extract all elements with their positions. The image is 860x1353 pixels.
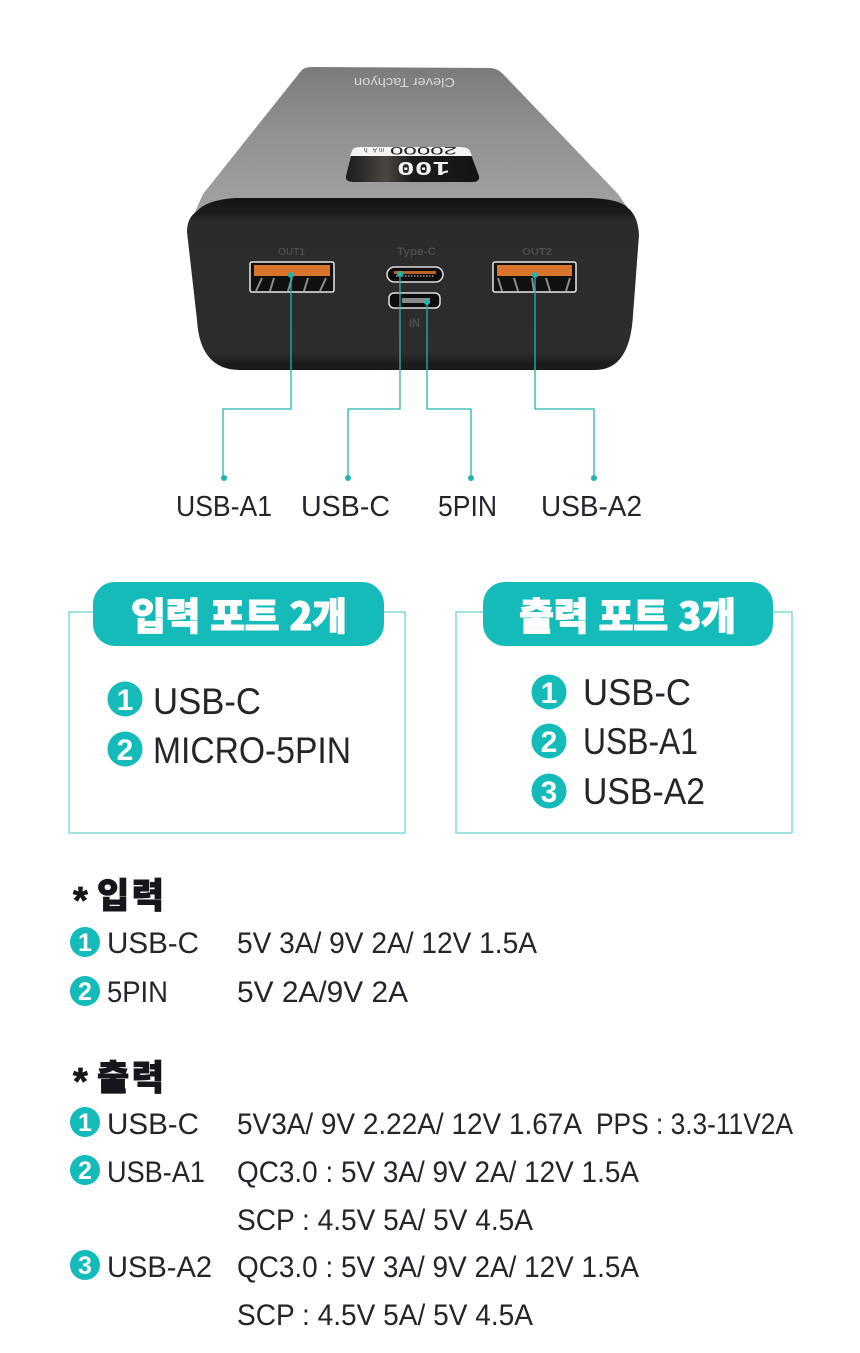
row: output USB-A2: 3: [78, 1252, 92, 1280]
battery display: [346, 144, 479, 182]
list: input ports: MICRO-5PIN: [153, 730, 351, 771]
panel: input ports: [69, 582, 405, 833]
list: input ports: [108, 681, 351, 771]
battery display: 100: [397, 156, 450, 178]
row: input 5PIN: [70, 976, 408, 1009]
row: output USB-C: [70, 1107, 793, 1141]
row: output USB-A2: QC3.0 : 5V 3A/ 9V 2A/ 12V 1.5A: [237, 1251, 639, 1284]
front face of the power bank: [187, 198, 639, 370]
leader line: USB-C: [345, 271, 403, 481]
heading: input: [73, 868, 164, 922]
port: OUT2: OUT2: [522, 246, 552, 258]
row: input 5PIN: 5PIN: [107, 976, 168, 1009]
heading pill: output ports: [483, 582, 773, 646]
port name labels: 5PIN: [438, 491, 497, 523]
heading: input: 입력: [97, 868, 164, 919]
row: output USB-A2: [70, 1250, 639, 1332]
row: output USB-A1: USB-A1: [107, 1156, 205, 1189]
port: OUT2: [493, 246, 576, 292]
brand text: Clever Tachyon: [354, 75, 455, 89]
row: input USB-C: USB-C: [107, 927, 199, 960]
list: output ports: USB-C: [583, 672, 691, 713]
heading pill: output ports: 출력 포트 3개: [519, 586, 736, 641]
battery display: mA h: [364, 146, 384, 152]
list: input ports: 1: [117, 684, 133, 717]
row: input USB-C: 5V 3A/ 9V 2A/ 12V 1.5A: [237, 927, 537, 960]
section: output specs: [70, 1050, 793, 1332]
row: output USB-A2: SCP : 4.5V 5A/ 5V 4.5A: [237, 1299, 533, 1332]
port: micro USB: IN: [409, 316, 420, 330]
list: output ports: USB-A2: [583, 771, 705, 812]
product photo: power bank: [187, 67, 639, 370]
port name labels: USB-A1: [176, 491, 272, 523]
port name labels: USB-A2: [541, 491, 642, 523]
panel: output ports: [456, 582, 792, 833]
leader line: USB-A1: [221, 272, 294, 481]
list: input ports: USB-C: [153, 681, 261, 722]
list: output ports: 2: [541, 726, 557, 759]
row: output USB-A1: 2: [78, 1157, 92, 1185]
row: input USB-C: 1: [78, 929, 92, 957]
port name labels: [176, 491, 642, 523]
heading pill: input ports: [93, 582, 384, 646]
port name labels: USB-C: [301, 491, 390, 523]
row: output USB-A1: [70, 1155, 639, 1237]
heading: output: 출력: [97, 1050, 164, 1101]
port: Type-C: Type-C: [397, 246, 436, 258]
port: OUT1: OUT1: [278, 246, 305, 258]
port: Type-C: [387, 246, 443, 282]
row: input USB-C: [70, 927, 537, 960]
leader line: USB-A2: [532, 272, 597, 481]
list: output ports: 3: [541, 776, 557, 809]
row: output USB-C: USB-C: [107, 1108, 199, 1141]
battery display: 20000: [390, 144, 457, 156]
row: input 5PIN: 5V 2A/9V 2A: [237, 976, 408, 1009]
port: OUT1: [250, 246, 334, 292]
list: input ports: 2: [117, 734, 133, 767]
row: output USB-A2: USB-A2: [107, 1251, 212, 1284]
row: output USB-A1: QC3.0 : 5V 3A/ 9V 2A/ 12V 1.5A: [237, 1156, 639, 1189]
heading: input: *: [73, 880, 88, 922]
heading pill: input ports: 입력 포트 2개: [131, 586, 347, 641]
heading: output: *: [73, 1061, 88, 1103]
row: output USB-A1: SCP : 4.5V 5A/ 5V 4.5A: [237, 1204, 533, 1237]
row: output USB-C: PPS : 3.3-11V2A: [596, 1108, 793, 1141]
row: output USB-C: 1: [78, 1109, 92, 1137]
port: micro USB: [389, 293, 440, 330]
top face of the power bank: [194, 67, 632, 214]
list: output ports: 1: [541, 677, 557, 710]
section: input specs: [70, 868, 537, 1009]
list: output ports: [532, 672, 705, 812]
list: output ports: USB-A1: [583, 721, 698, 762]
row: input 5PIN: 2: [78, 978, 92, 1006]
leader line: 5PIN: [424, 299, 474, 481]
row: output USB-C: 5V3A/ 9V 2.22A/ 12V 1.67A: [237, 1108, 582, 1141]
